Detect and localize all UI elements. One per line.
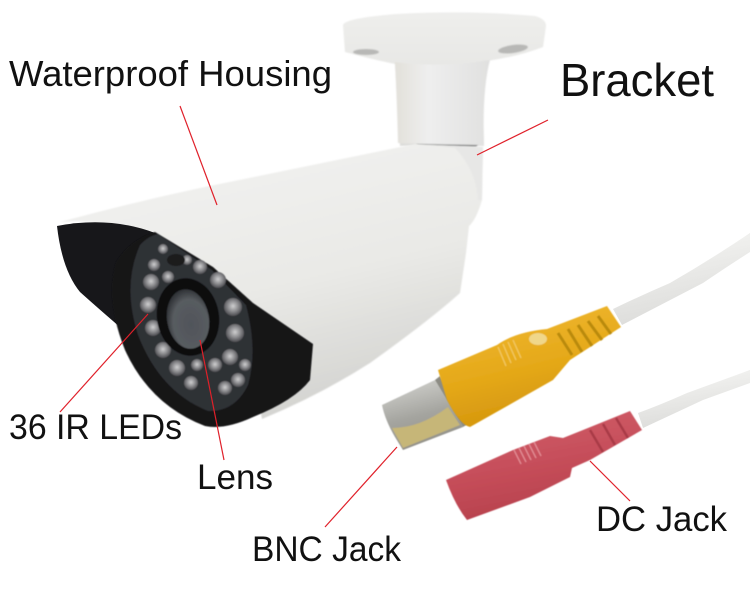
front bezel with LEDs and lens (112, 232, 313, 427)
red DC connector (446, 411, 642, 520)
yellow BNC connector (438, 306, 621, 427)
upper white cable (613, 233, 750, 325)
label: DC Jack: DC Jack (596, 500, 727, 539)
label: Lens: Lens (197, 458, 273, 497)
LED ring plate (130, 234, 253, 411)
BNC metal barrel (382, 376, 468, 450)
wall mount bracket (343, 12, 546, 147)
label: Waterproof Housing: Waterproof Housing (9, 53, 332, 94)
lens glass (162, 286, 214, 352)
dark speck top of ring (167, 254, 185, 266)
fine ribs (498, 340, 521, 366)
IR LEDs (140, 244, 251, 395)
red leader lines (60, 106, 630, 527)
grip ridges (558, 316, 611, 355)
lower white cable (638, 370, 750, 428)
gold plating (392, 407, 460, 448)
highlight (529, 333, 547, 345)
metal collar (435, 376, 468, 427)
hood interior shadow (57, 222, 175, 340)
camera body: waterproof housing (60, 144, 483, 419)
ribs (590, 418, 628, 452)
outer dark bezel (112, 232, 313, 427)
label: 36 IR LEDs: 36 IR LEDs (9, 408, 182, 447)
label: Bracket: Bracket (560, 54, 714, 106)
lens ring (151, 273, 225, 361)
label: BNC Jack: BNC Jack (252, 530, 401, 569)
